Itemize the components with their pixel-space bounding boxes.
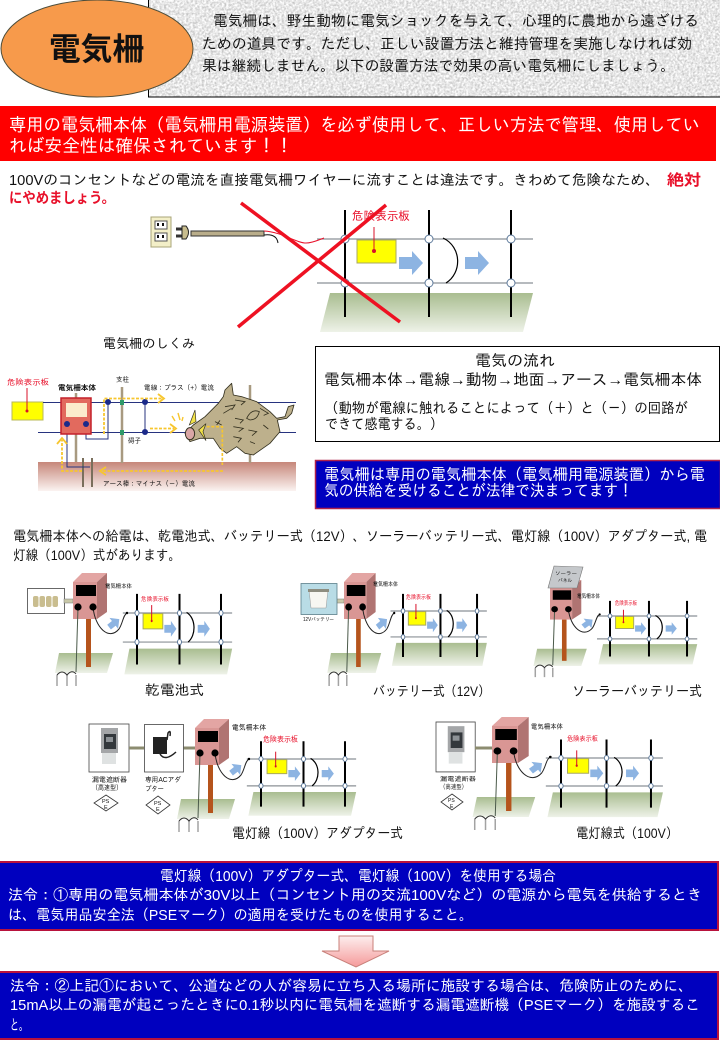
panel: legal power supply note bbox=[316, 460, 720, 508]
unit label: 電気柵本体 bbox=[531, 722, 563, 731]
danger sign: 危険表示板 bbox=[7, 378, 49, 387]
breaker label bbox=[92, 776, 127, 792]
panel: law 1: 電灯線（100V）アダプター式、電灯線（100V）を使用する場合 bbox=[160, 868, 556, 885]
system: solar battery type bbox=[533, 566, 702, 699]
panel: law 1 bbox=[0, 862, 718, 930]
prohibited direct connection diagram bbox=[151, 203, 533, 332]
icon: PSE mark: PS bbox=[154, 801, 162, 807]
intro text: 電気柵は、野生動物に電気ショックを与えて、心理的に農地から遠ざける bbox=[213, 13, 699, 30]
labels: 支柱 bbox=[116, 376, 129, 384]
intro text: 果は継続しません。以下の設置方法で効果の高い電気柵にしましょう。 bbox=[202, 58, 675, 75]
icon: 12V battery: 12Vバッテリー bbox=[303, 616, 334, 623]
warning text: 絶対 bbox=[667, 171, 701, 189]
energizer unit bbox=[533, 580, 601, 677]
danger sign label: 危険表示板 bbox=[352, 209, 410, 223]
connector bbox=[129, 746, 195, 750]
connection nodes bbox=[105, 399, 148, 435]
fence bbox=[546, 740, 663, 817]
icon: leakage breaker bbox=[89, 724, 129, 772]
icon: PSE mark bbox=[94, 795, 118, 811]
panel: law 1: 法令：①専用の電気柵本体が30V以上（コンセント用の交流100Vなど）の電源から電気を供給するとき bbox=[8, 887, 702, 904]
icon: PSE mark: PS bbox=[448, 798, 455, 804]
posts bbox=[76, 385, 250, 463]
breaker label: （高速型） bbox=[440, 784, 467, 791]
panel: header intro bbox=[148, 0, 720, 97]
adapter label: 専用ACアダ bbox=[145, 776, 181, 784]
icon: PSE mark: E bbox=[450, 804, 454, 810]
power supply types text: 灯線（100V）式があります。 bbox=[13, 547, 181, 563]
labels: 碍子 bbox=[128, 437, 141, 445]
caption: バッテリー式（12V） bbox=[373, 683, 490, 699]
caption: 乾電池式 bbox=[145, 682, 204, 698]
adapter label: プター bbox=[145, 785, 164, 793]
earth rods bbox=[83, 458, 92, 487]
labels: アース棒：マイナス（－）電流 bbox=[103, 479, 195, 488]
fence bbox=[247, 741, 356, 816]
labels: 電線：プラス（+）電流 bbox=[144, 384, 214, 392]
danger label: 危険表示板 bbox=[141, 596, 169, 603]
icon: PSE mark: E bbox=[156, 807, 160, 813]
fence bbox=[123, 594, 232, 674]
icon: plug and cord bbox=[176, 226, 324, 243]
icon: 12V battery bbox=[301, 584, 344, 623]
power supply types text bbox=[13, 528, 707, 563]
system: battery type bbox=[301, 573, 490, 699]
panel: legal power supply note: 気の供給を受けることが法律で決まってます！ bbox=[324, 482, 633, 500]
panel: current flow: （動物が電線に触れることによって（＋）と（－）の回路が bbox=[325, 400, 688, 417]
system: mains type bbox=[436, 717, 678, 841]
fence bbox=[597, 601, 697, 664]
red banner: safety: 専用の電気柵本体（電気柵用電源装置）を必ず使用して、正しい方法で管理、使用してい bbox=[9, 115, 700, 135]
energizer unit bbox=[177, 719, 250, 832]
icon: PSE mark bbox=[441, 794, 463, 810]
icon: solar panel: ソーラー bbox=[555, 571, 577, 577]
icon: PSE mark: E bbox=[104, 805, 108, 811]
panel: current flow: 電気柵本体→電線→動物→地面→アース→電気柵本体 bbox=[324, 371, 702, 389]
energizer unit bbox=[473, 717, 552, 830]
panel: current flow bbox=[316, 346, 720, 442]
panel: law 2: と。 bbox=[10, 1017, 28, 1034]
unit label: 電気柵本体 bbox=[232, 723, 266, 732]
panel: law 2: 15mA以上の漏電が起こったときに0.1秒以内に電気柵を遮断する漏電遮断機（PSEマーク）を施設するこ bbox=[10, 997, 700, 1014]
title oval: 電気柵 bbox=[49, 32, 144, 67]
connector bbox=[475, 746, 492, 750]
panel: law 1: は、電気用品安全法（PSEマーク）の適用を受けたものを使用すること。 bbox=[8, 907, 473, 924]
icon: wild boar bbox=[185, 383, 294, 465]
panel: law 2 bbox=[0, 972, 718, 1039]
warning text: 100Vのコンセントなどの電流を直接電気柵ワイヤーに流すことは違法です。きわめて危険なため、 bbox=[9, 172, 660, 189]
danger sign bbox=[7, 378, 49, 420]
icon: batteries bbox=[28, 588, 73, 614]
title oval bbox=[1, 0, 193, 97]
panel: current flow: できて感電する。） bbox=[325, 417, 443, 433]
breaker label bbox=[440, 775, 477, 791]
fence bbox=[391, 594, 487, 666]
main unit bbox=[58, 383, 96, 434]
ground bbox=[38, 462, 296, 491]
danger label: 危険表示板 bbox=[263, 735, 298, 744]
energizer unit bbox=[327, 573, 395, 686]
icon: PSE mark: PS bbox=[102, 799, 110, 805]
icon: AC adapter bbox=[144, 724, 184, 772]
warning text: にやめましょう。 bbox=[9, 190, 115, 207]
unit label: 電気柵本体 bbox=[577, 592, 600, 600]
system: dry cell type bbox=[28, 573, 232, 698]
textured background panel bbox=[148, 0, 720, 97]
current arrows bbox=[57, 394, 223, 475]
breaker label: 漏電遮断器 bbox=[440, 775, 477, 783]
labels bbox=[103, 376, 214, 488]
wires bbox=[38, 402, 296, 432]
diagram caption: 電気柵のしくみ bbox=[103, 336, 195, 351]
breaker label: （高速型） bbox=[92, 784, 122, 792]
system: mains adapter type bbox=[89, 719, 403, 841]
breaker label: 漏電遮断器 bbox=[92, 776, 127, 784]
intro text bbox=[202, 13, 699, 75]
icon: PSE mark bbox=[146, 796, 170, 814]
warning text bbox=[9, 171, 701, 207]
wiring bbox=[67, 402, 145, 467]
icon: leakage breaker bbox=[436, 722, 475, 772]
energizer unit bbox=[55, 573, 128, 686]
danger label: 危険表示板 bbox=[567, 735, 598, 743]
caption: 電灯線（100V）アダプター式 bbox=[232, 825, 403, 841]
caption: 電灯線式（100V） bbox=[576, 825, 678, 841]
intro text: ための道具です。ただし、正しい設置方法と維持管理を実施しなければ効 bbox=[202, 35, 692, 53]
icon: solar panel bbox=[548, 566, 583, 588]
adapter label bbox=[145, 776, 181, 793]
danger label: 危険表示板 bbox=[615, 600, 637, 607]
electric fence mechanism diagram bbox=[7, 376, 296, 491]
red cross bbox=[238, 203, 400, 327]
arrow: down to law 2 bbox=[322, 936, 389, 967]
main fence bbox=[317, 210, 533, 332]
unit label: 電気柵本体 bbox=[105, 582, 132, 590]
red banner: safety bbox=[0, 106, 716, 161]
danger label: 危険表示板 bbox=[406, 594, 431, 601]
panel: legal power supply note: 電気柵は専用の電気柵本体（電気柵用電源装置）から電 bbox=[324, 466, 705, 484]
unit label: 電気柵本体 bbox=[373, 580, 398, 588]
main unit: 電気柵本体 bbox=[58, 383, 96, 392]
icon: wall outlet bbox=[151, 217, 171, 247]
icon: solar panel: パネル bbox=[558, 578, 572, 584]
red banner: safety: れば安全性は確保されています！！ bbox=[9, 136, 293, 156]
caption: ソーラーバッテリー式 bbox=[572, 683, 702, 699]
panel: current flow: 電気の流れ bbox=[475, 353, 555, 370]
panel: law 2: 法令：②上記①において、公道などの人が容易に立ち入る場所に施設する場合は、危険防止のために、 bbox=[10, 978, 693, 995]
